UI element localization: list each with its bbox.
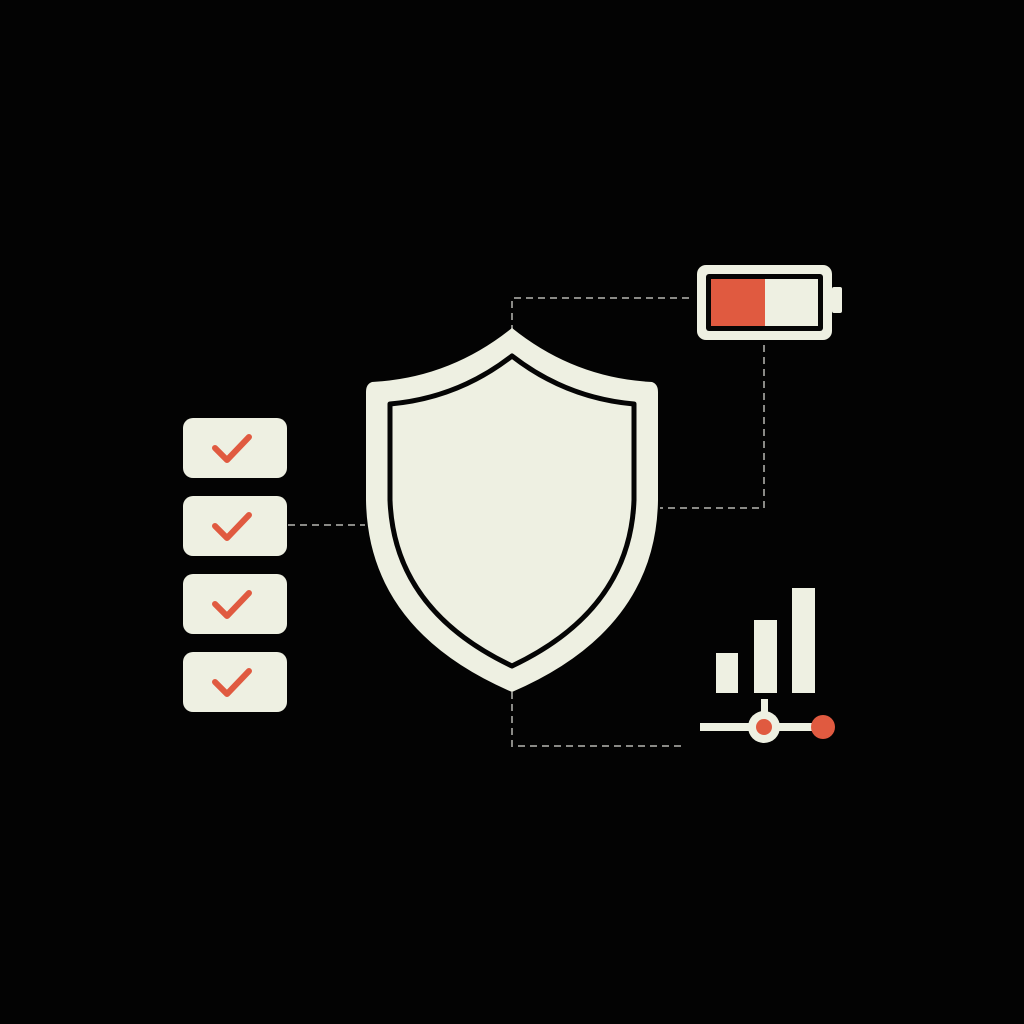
checkbox 4 <box>183 652 287 712</box>
connector: checklist to shield <box>288 524 365 526</box>
icon: battery <box>697 265 842 340</box>
bar chart <box>716 588 815 693</box>
connector: shield to battery <box>512 298 690 332</box>
checkbox 2 <box>183 496 287 556</box>
connector: shield bottom to chart <box>512 692 686 746</box>
icon: shield <box>366 328 658 692</box>
connector: battery to shield right <box>660 345 764 508</box>
checklist <box>183 418 287 712</box>
timeline <box>700 699 835 743</box>
checkbox 3 <box>183 574 287 634</box>
checkbox 1 <box>183 418 287 478</box>
